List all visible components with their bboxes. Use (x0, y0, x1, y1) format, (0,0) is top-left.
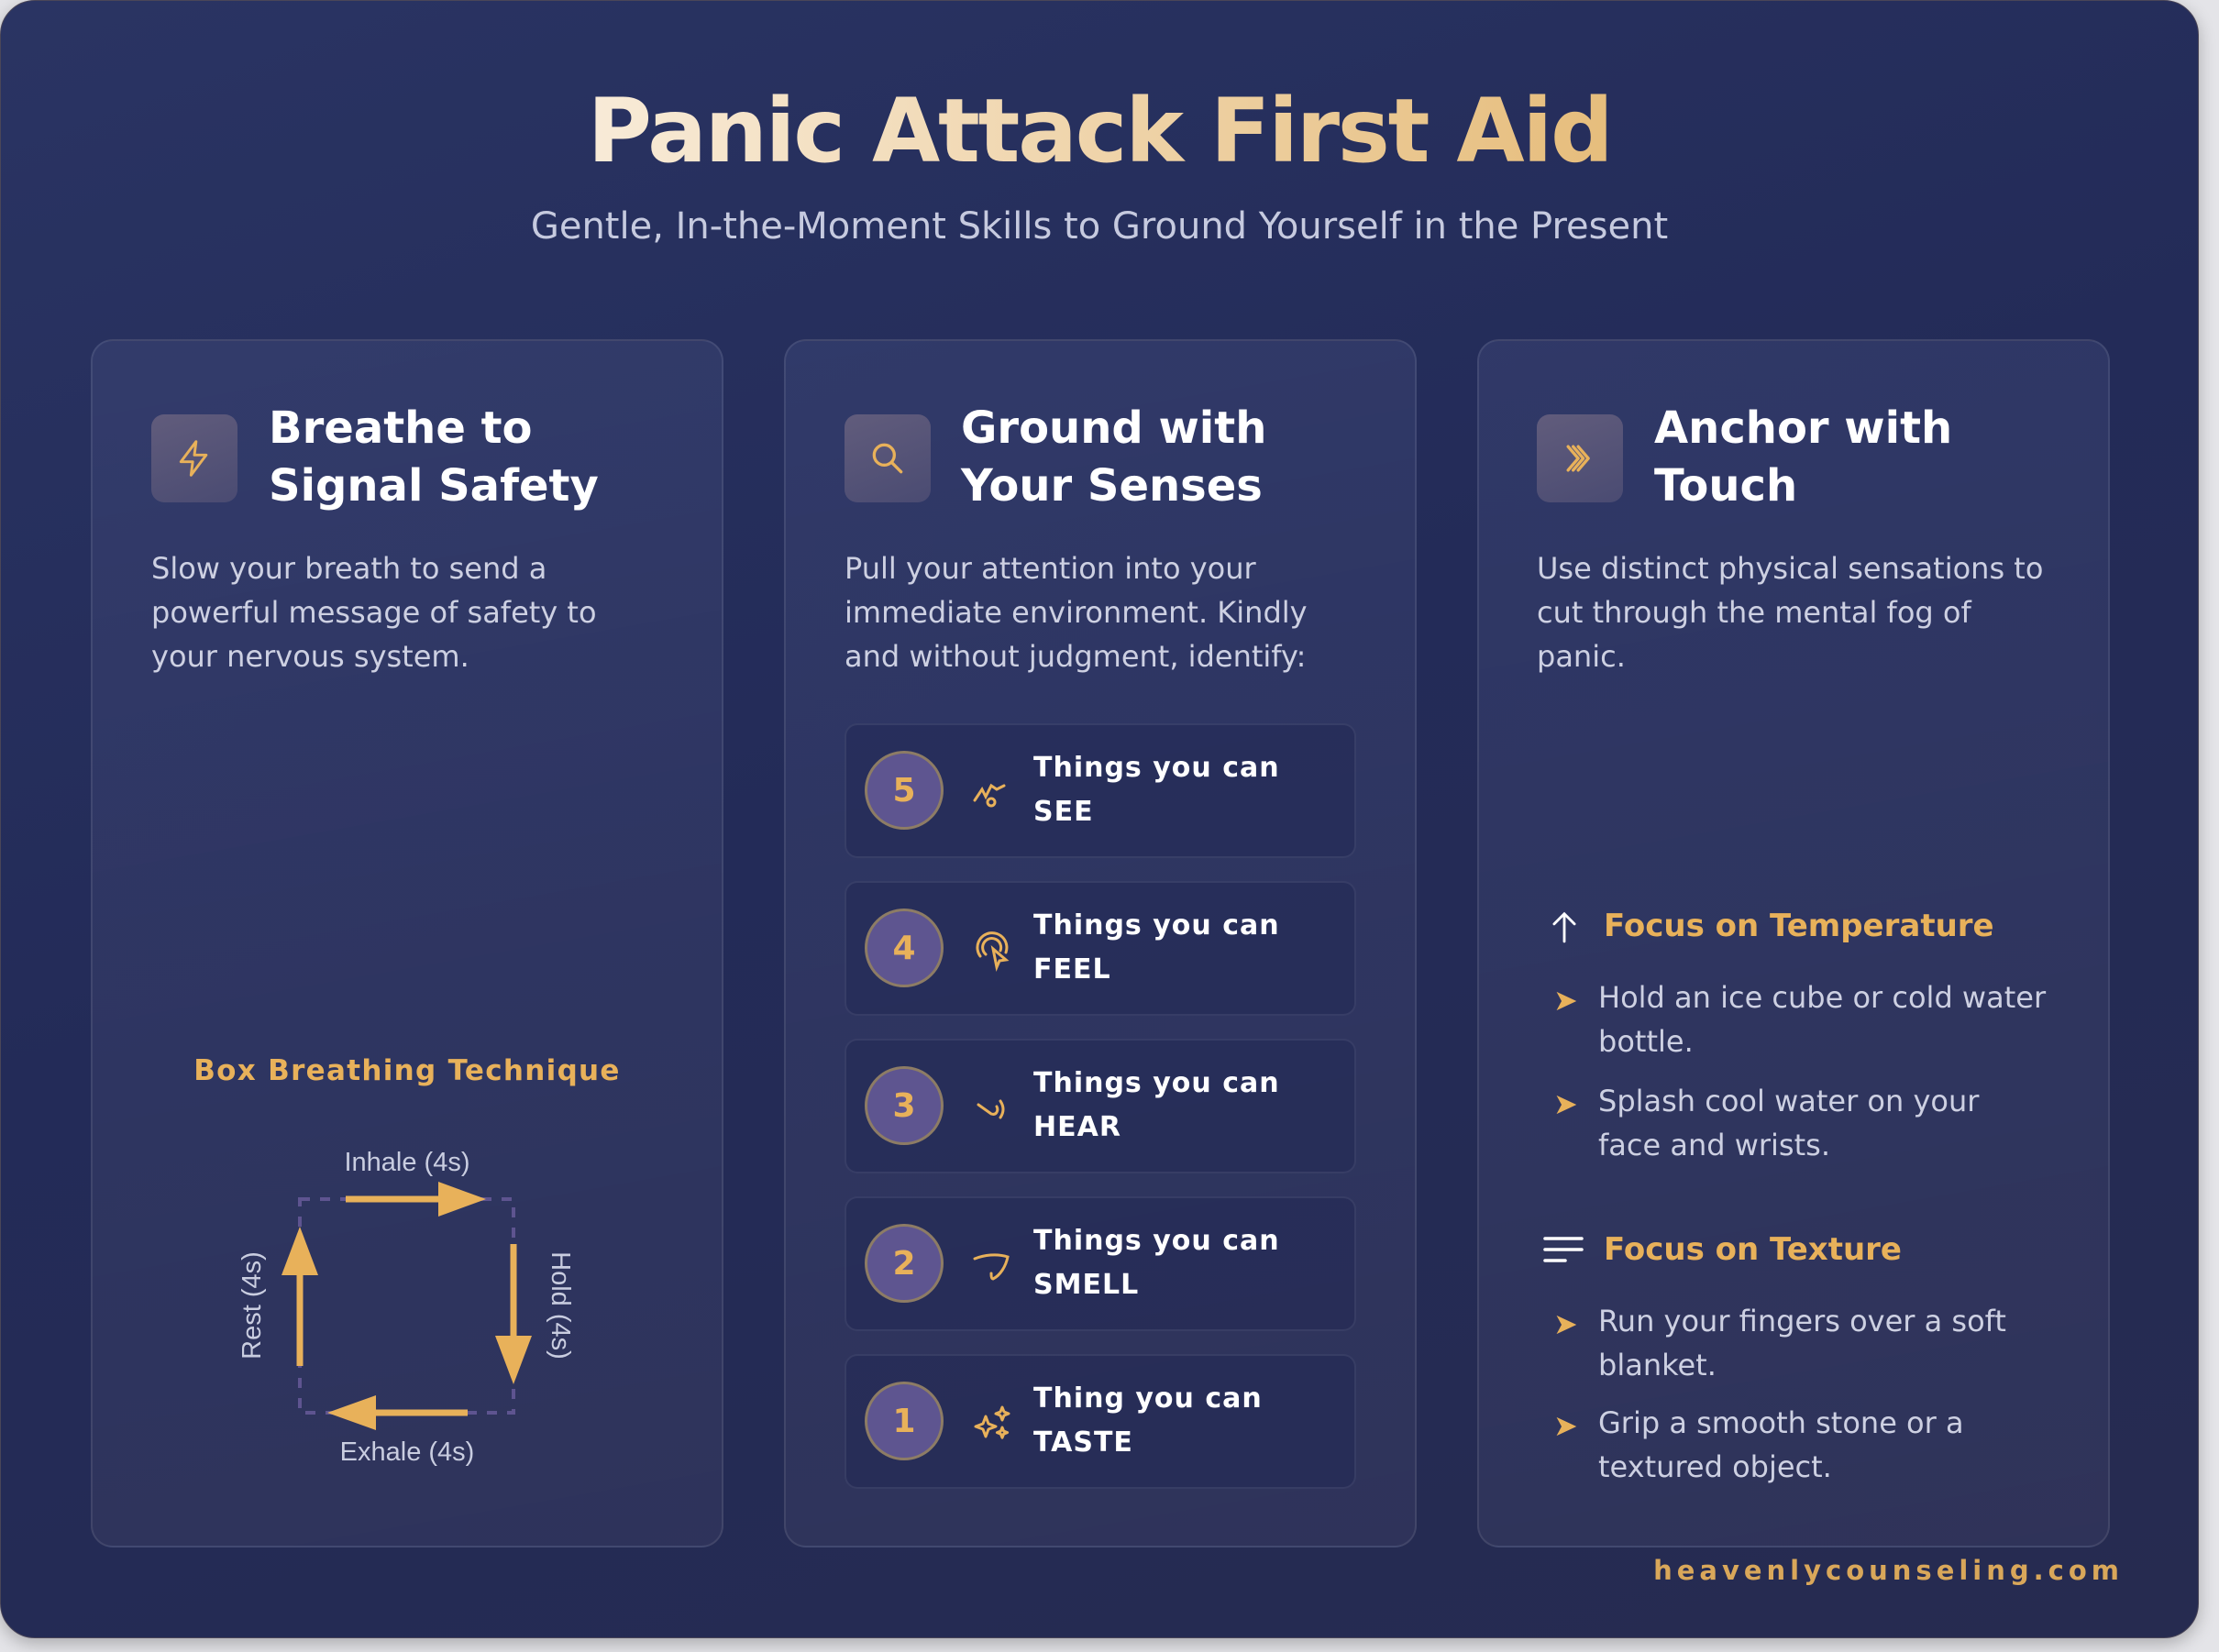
text: ground description (845, 551, 1308, 674)
list: texture bullets: blanket. (1598, 1348, 1717, 1382)
list: texture bullets: ➤ (1553, 1408, 1578, 1443)
item: hear: 3 (892, 1087, 916, 1124)
item: smell: 2 (892, 1245, 916, 1282)
panel: breathe (91, 339, 723, 1547)
list: texture bullets (1553, 1304, 2006, 1484)
heading: breathe: Breathe to (269, 402, 533, 454)
icon: magnifier (845, 414, 931, 502)
heading: breathe: Signal Safety (269, 460, 599, 512)
item: taste (845, 1354, 1356, 1489)
item: see: SEE (1033, 796, 1094, 828)
chart: box breathing diagram: Rest (4s) (237, 1251, 267, 1360)
panel: ground (784, 339, 1417, 1547)
item: see: Things you can (1033, 752, 1280, 784)
text: anchor description: Use distinct physical sensations to (1537, 551, 2043, 586)
item: hear (845, 1039, 1356, 1173)
text: breathe description: powerful message of safety to (151, 595, 597, 630)
list: temperature bullets: Splash cool water on your (1598, 1084, 1979, 1118)
item: feel: Things you can (1033, 909, 1280, 942)
item: taste: 1 (892, 1403, 916, 1439)
heading: ground: Ground with (961, 402, 1266, 454)
text: breathe description: your nervous system. (151, 639, 469, 674)
icon: lightning (151, 414, 237, 502)
item: hear: Things you can (1033, 1067, 1280, 1099)
chart: box breathing diagram: Inhale (4s) (344, 1148, 470, 1177)
item: smell (845, 1196, 1356, 1331)
heading: ground (961, 402, 1266, 512)
heading: anchor: Touch (1654, 460, 1797, 512)
list: temperature bullets (1553, 980, 2047, 1162)
panel: anchor (1477, 339, 2110, 1547)
list: temperature bullets: ➤ (1553, 1086, 1578, 1121)
list: texture bullets: textured object. (1598, 1449, 1832, 1484)
footer: website: heavenlycounseling.com (1653, 1555, 2124, 1586)
item: see (845, 723, 1356, 858)
chart: box breathing diagram: Hold (4s) (546, 1251, 575, 1360)
item: feel: 4 (892, 930, 916, 966)
list: texture bullets: Grip a smooth stone or a (1598, 1405, 1964, 1440)
chart: box breathing diagram: Exhale (4s) (340, 1437, 474, 1467)
list: temperature bullets: face and wrists. (1598, 1128, 1830, 1162)
item: see: 5 (892, 772, 916, 809)
text: ground description: Pull your attention into your (845, 551, 1256, 586)
title: Panic Attack First Aid (588, 80, 1611, 182)
list: temperature bullets: ➤ (1553, 983, 1578, 1018)
item: feel: FEEL (1033, 953, 1111, 986)
heading: texture: Focus on Texture (1604, 1231, 1902, 1268)
heading: anchor (1654, 402, 1952, 512)
icon: chevrons (1537, 414, 1623, 502)
heading: anchor: Anchor with (1654, 402, 1952, 454)
heading: ground: Your Senses (961, 460, 1263, 512)
text: ground description: and without judgment, identify: (845, 639, 1306, 674)
text: breathe description: Slow your breath to send a (151, 551, 546, 586)
list: texture bullets: Run your fingers over a soft (1598, 1304, 2006, 1338)
text: anchor description: panic. (1537, 639, 1626, 674)
item: hear: HEAR (1033, 1111, 1121, 1143)
item: taste: Thing you can (1033, 1382, 1263, 1415)
heading: temperature: Focus on Temperature (1604, 908, 1994, 944)
list: temperature bullets: bottle. (1598, 1024, 1694, 1059)
text: breathe description (151, 551, 597, 674)
heading: breathe (269, 402, 599, 512)
list: texture bullets: ➤ (1553, 1306, 1578, 1341)
heading: box breathing: Box Breathing Technique (193, 1054, 621, 1087)
item: smell: SMELL (1033, 1269, 1139, 1301)
list: temperature bullets: Hold an ice cube or cold water (1598, 980, 2046, 1015)
item: taste: TASTE (1033, 1426, 1133, 1459)
item: feel (845, 881, 1356, 1016)
text: anchor description: cut through the mental fog of (1537, 595, 1971, 630)
item: smell: Things you can (1033, 1225, 1280, 1257)
chart: box breathing diagram (237, 1148, 575, 1467)
text: anchor description (1537, 551, 2043, 674)
subtitle: Gentle, In-the-Moment Skills to Ground Yourself in the Present (531, 205, 1668, 248)
text: ground description: immediate environment. Kindly (845, 595, 1308, 630)
